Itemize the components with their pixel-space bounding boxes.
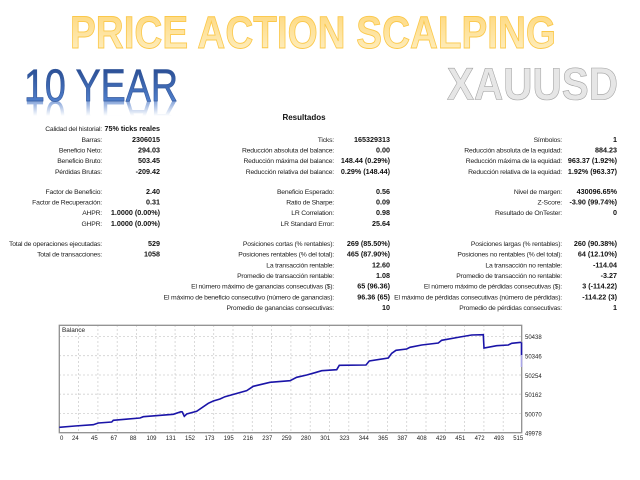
results column 3: 0 bbox=[613, 208, 617, 217]
results column 2: Reducción absoluta del balance: bbox=[242, 148, 334, 154]
x axis labels: 109 bbox=[146, 436, 157, 442]
results column 1: 2306015 bbox=[132, 135, 160, 144]
results column 1: 75% ticks reales bbox=[104, 124, 160, 133]
results column 2: 65 (96.36) bbox=[357, 282, 391, 290]
results column 2: 0.09 bbox=[376, 198, 390, 206]
x axis labels: 24 bbox=[72, 436, 79, 442]
results column 3: Promedio de transacción no rentable: bbox=[456, 273, 562, 280]
results column 2: 165329313 bbox=[354, 135, 390, 144]
x axis labels: 88 bbox=[130, 436, 137, 442]
results column 2: Promedio de ganancias consecutivas: bbox=[227, 305, 334, 312]
results column 2: 12.60 bbox=[372, 260, 390, 270]
x axis labels: 365 bbox=[378, 436, 389, 442]
results column 2: La transacción rentable: bbox=[266, 262, 334, 270]
results column 3: La transacción no rentable: bbox=[485, 262, 562, 270]
results column 3: -114.22 (3) bbox=[582, 292, 618, 302]
results column 3: El máximo de pérdidas consecutivas (número de pérdidas): bbox=[394, 294, 562, 302]
results column 1: Beneficio Neto: bbox=[59, 148, 102, 154]
x axis labels: 67 bbox=[110, 436, 118, 442]
results column 3: 884.23 bbox=[595, 146, 617, 154]
y axis labels: 50438 bbox=[525, 335, 542, 341]
x axis labels: 0 bbox=[60, 436, 64, 442]
results column 1: 503.45 bbox=[138, 156, 160, 165]
y axis labels: 49978 bbox=[525, 432, 542, 438]
results column 2: 148.44 (0.29%) bbox=[341, 156, 391, 165]
x axis labels: 493 bbox=[494, 436, 505, 442]
x axis labels: 387 bbox=[397, 436, 408, 442]
x axis labels: 280 bbox=[301, 436, 312, 442]
results column 3: 3 (-114.22) bbox=[582, 282, 618, 290]
results column 1: 1058 bbox=[144, 250, 160, 258]
results column 3: -3.27 bbox=[601, 271, 617, 280]
results column 1: 2.40 bbox=[146, 187, 160, 196]
results column 1: Factor de Recuperación: bbox=[32, 200, 102, 206]
results column 1: GHPR: bbox=[81, 221, 102, 228]
results column 1 bbox=[9, 124, 161, 258]
results column 3: Posiciones largas (% rentables): bbox=[471, 241, 562, 248]
results column 3: Resultado de OnTester: bbox=[495, 210, 562, 217]
results column 3: Reducción absoluta de la equidad: bbox=[464, 148, 562, 154]
results column 3: 963.37 (1.92%) bbox=[568, 156, 618, 165]
results column 3: Nivel de margen: bbox=[514, 189, 562, 196]
results column 3: -114.04 bbox=[593, 260, 617, 270]
results column 1: Total de operaciones ejecutadas: bbox=[9, 241, 102, 248]
results column 2: Reducción relativa del balance: bbox=[246, 169, 334, 176]
x axis labels: 451 bbox=[455, 436, 466, 442]
results column 3: Reducción máxima de la equidad: bbox=[466, 158, 562, 165]
results column 3: 1.92% (963.37) bbox=[568, 167, 618, 176]
results column 3: 430096.65% bbox=[577, 187, 618, 196]
x axis labels: 237 bbox=[262, 436, 273, 442]
results column 2: LR Correlation: bbox=[291, 210, 334, 217]
results column 3: 1 bbox=[613, 303, 617, 312]
balance line bbox=[59, 335, 521, 427]
results column 1: AHPR: bbox=[82, 210, 102, 217]
x axis labels: 45 bbox=[91, 436, 98, 442]
results column 2: 0.00 bbox=[376, 146, 390, 154]
results column 1: Calidad del historial: bbox=[45, 126, 102, 133]
results column 2: 0.98 bbox=[376, 208, 390, 217]
results column 1: 0.31 bbox=[146, 198, 160, 206]
results column 3: Promedio de pérdidas consecutivas: bbox=[459, 305, 562, 312]
x axis labels: 195 bbox=[224, 436, 234, 442]
results column 3 bbox=[394, 135, 618, 312]
results column 2 bbox=[164, 135, 391, 312]
results column 3: 260 (90.38%) bbox=[574, 239, 618, 248]
results column 1: 294.03 bbox=[138, 146, 160, 154]
results column 3: Z-Score: bbox=[538, 200, 562, 206]
results column 1: -209.42 bbox=[136, 167, 160, 176]
x axis labels: 152 bbox=[185, 436, 196, 442]
results column 1: Total de transacciones: bbox=[37, 252, 102, 258]
title: PRICE ACTION SCALPING bbox=[70, 7, 556, 58]
y axis labels: 50070 bbox=[525, 412, 542, 418]
y axis labels bbox=[525, 335, 542, 438]
x axis labels: 216 bbox=[243, 436, 254, 442]
heading: 10 year: 10 YEAR bbox=[24, 60, 178, 111]
results column 2: Reducción máxima del balance: bbox=[243, 158, 334, 165]
x axis labels: 323 bbox=[340, 436, 350, 442]
x axis labels: 344 bbox=[359, 436, 369, 442]
results column 2: 465 (87.90%) bbox=[347, 250, 391, 258]
results column 2: El máximo de beneficio consecutivo (número de ganancias): bbox=[164, 294, 334, 302]
y axis labels: 50346 bbox=[525, 354, 542, 360]
results column 1: 1.0000 (0.00%) bbox=[111, 208, 161, 217]
results column 1: Barras: bbox=[81, 137, 102, 144]
x axis labels: 429 bbox=[436, 436, 447, 442]
x axis labels: 173 bbox=[204, 436, 215, 442]
results column 2: 0.29% (148.44) bbox=[341, 167, 391, 176]
results column 3: -3.90 (99.74%) bbox=[569, 198, 618, 206]
results column 2: El número máximo de ganancias consecutivas ($): bbox=[191, 284, 334, 290]
x axis labels: 259 bbox=[282, 436, 292, 442]
results column 2: Posiciones cortas (% rentables): bbox=[243, 241, 334, 248]
results column 3: 1 bbox=[613, 135, 617, 144]
balance chart bbox=[59, 325, 542, 442]
results column 2: 269 (85.50%) bbox=[347, 239, 391, 248]
results column 1: Pérdidas Brutas: bbox=[55, 169, 102, 176]
x axis labels: 515 bbox=[513, 436, 524, 442]
results column 2: Ratio de Sharpe: bbox=[286, 200, 334, 206]
results column 2: 25.64 bbox=[372, 219, 390, 228]
results column 1: 1.0000 (0.00%) bbox=[111, 219, 161, 228]
x axis labels: 472 bbox=[475, 436, 485, 442]
x axis labels: 301 bbox=[320, 436, 331, 442]
results column 2: Beneficio Esperado: bbox=[277, 189, 334, 196]
results column 2: 0.56 bbox=[376, 187, 390, 196]
results column 2: 96.36 (65) bbox=[357, 292, 391, 302]
results column 2: Ticks: bbox=[318, 137, 334, 144]
results column 2: 10 bbox=[382, 303, 390, 312]
heading: 10 year: 10 YEAR bbox=[24, 91, 178, 142]
results column 3: El número máximo de pérdidas consecutivas ($): bbox=[424, 284, 562, 290]
results column 2: Posiciones rentables (% del total): bbox=[238, 252, 334, 258]
y axis labels: 50162 bbox=[525, 393, 542, 399]
results column 3: Reducción relativa de la equidad: bbox=[468, 169, 562, 176]
results column 3: Posiciones no rentables (% del total): bbox=[457, 252, 562, 258]
heading: 10 year bbox=[24, 60, 178, 142]
heading: XAUUSD: XAUUSD bbox=[447, 58, 618, 110]
results column 2: LR Standard Error: bbox=[281, 221, 334, 228]
y axis labels: 50254 bbox=[525, 374, 542, 380]
chart legend: Balance bbox=[62, 327, 86, 334]
x axis labels: 131 bbox=[166, 436, 176, 442]
heading: Resultados: Resultados bbox=[282, 113, 326, 122]
results column 1: Factor de Beneficio: bbox=[46, 189, 102, 196]
results column 2: Promedio de transacción rentable: bbox=[237, 273, 334, 280]
x axis labels bbox=[60, 436, 524, 442]
results column 3: 64 (12.10%) bbox=[578, 250, 618, 258]
results column 2: 1.08 bbox=[376, 271, 390, 280]
results column 1: 529 bbox=[148, 239, 160, 248]
results column 3: Símbolos: bbox=[534, 137, 562, 144]
x axis labels: 408 bbox=[417, 436, 427, 442]
results column 1: Beneficio Bruto: bbox=[57, 158, 102, 165]
